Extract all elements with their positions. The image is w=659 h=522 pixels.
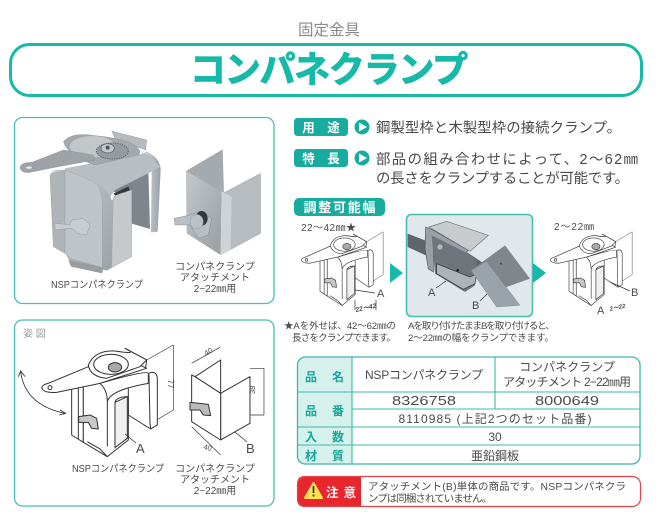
icon: use arrow — [354, 120, 370, 134]
drawing: attachment — [190, 347, 264, 455]
arrow: first — [390, 263, 403, 283]
label: attachment: アタッチメント — [180, 272, 250, 284]
label: dimension 38: 38 — [248, 386, 257, 394]
row labels: 入 — [305, 430, 317, 444]
label: B: B — [631, 287, 638, 299]
table values: 亜鉛鋼板 — [471, 449, 519, 463]
text: features — [376, 151, 638, 187]
caption: attachment: コンパネクランプ — [175, 463, 255, 475]
note: left — [284, 320, 396, 344]
drawing: NSP clamp — [18, 345, 173, 457]
label: B: B — [246, 441, 255, 456]
note: centre: Aを取り付けたままBを取り付けると、 — [408, 321, 555, 332]
label: attachment: 2−22㎜用 — [194, 284, 236, 295]
row labels: 名 — [332, 369, 344, 384]
table values: アタッチメント 2−22㎜用 — [503, 375, 631, 389]
arrow: second — [533, 263, 546, 283]
table values: 8000649 — [535, 393, 599, 408]
table values: 8110985 (上記2つのセット品番) — [398, 412, 592, 426]
callout: caution — [297, 476, 640, 507]
label: attachment: コンパネクランプ — [175, 261, 255, 273]
label: B: B — [472, 300, 479, 312]
table values: 30 — [488, 430, 502, 444]
label: 2-22: 2〜22㎜ — [554, 222, 594, 233]
label: A: A — [136, 441, 145, 456]
label: dimension 40 bottom: 40 — [202, 442, 213, 453]
label: A: A — [597, 305, 605, 317]
label: 77: 77 — [166, 380, 175, 389]
table: specs — [297, 357, 640, 464]
label: NSP clamp: NSPコンパネクランプ — [51, 279, 143, 291]
title banner — [10, 44, 642, 96]
note: centre: 2〜22㎜の幅をクランプできます。 — [408, 332, 554, 344]
table values: コンパネクランプ — [519, 360, 615, 374]
label: 22-42: 22〜42㎜★ — [301, 223, 356, 234]
panel: assembly photo — [406, 214, 532, 316]
caption: attachment — [175, 463, 255, 497]
caption: NSP clamp: NSPコンパネクランプ — [72, 463, 164, 475]
tag: use: 用 途 — [302, 120, 340, 135]
text: features: の長さをクランプすることが可能です。 — [376, 170, 629, 187]
note: left: ★Aを外せば、42〜62㎜の — [284, 320, 396, 332]
heading: caution: 注意 — [326, 485, 356, 500]
panel: product photo — [14, 118, 274, 304]
table values: NSPコンパネクランプ — [365, 368, 483, 382]
row labels: 材 — [305, 448, 317, 463]
icon: warning — [305, 483, 322, 498]
caution text: アタッチメント(B)単体の商品です。NSPコンパネクラ — [368, 480, 626, 493]
tag: adjustable width: 調整可能幅 — [304, 200, 376, 215]
table values — [365, 360, 631, 463]
diagram: clamp 2-22 — [550, 222, 638, 317]
table values: 8326758 — [392, 393, 456, 408]
caption: attachment: 2−22㎜用 — [194, 486, 236, 497]
text: use: 鋼製型枠と木製型枠の接続クランプ。 — [376, 120, 621, 136]
row labels — [305, 369, 344, 463]
label: A: A — [428, 287, 436, 299]
title: コンパネクランプ — [190, 49, 468, 90]
caution text — [368, 480, 626, 505]
caution text: ンプは同梱されていません。 — [368, 492, 492, 505]
dimension: 22-42: 22〜42 — [354, 303, 377, 314]
panel: outline drawing — [14, 320, 274, 506]
subtitle: 固定金具 — [298, 21, 360, 39]
note: centre — [408, 321, 555, 344]
icon: features arrow — [354, 150, 370, 166]
diagram: clamp 22-42 — [301, 223, 385, 314]
label: dimension 40 top: 40 — [202, 346, 214, 358]
heading: figure: 姿 図 — [23, 327, 46, 340]
note: left: 長さをクランプできます。 — [292, 333, 396, 344]
label: A: A — [377, 288, 385, 300]
row labels: 数 — [332, 429, 344, 444]
text: features: 部品の組み合わせによって、2〜62㎜ — [376, 151, 638, 168]
tag: features: 特 長 — [302, 151, 340, 166]
tag: use — [294, 118, 348, 136]
photo: attachment — [174, 149, 261, 255]
row labels: 品 — [305, 370, 317, 384]
row labels: 番 — [332, 404, 344, 418]
dimension: 2-22: 2〜22 — [608, 304, 627, 313]
row labels: 質 — [332, 448, 344, 463]
row labels: 品 — [305, 404, 317, 418]
photo: NSP clamp — [20, 131, 161, 273]
label: attachment — [175, 261, 255, 295]
caption: attachment: アタッチメント — [180, 474, 250, 486]
tag: features — [294, 149, 348, 167]
tag: adjustable width — [294, 198, 385, 216]
